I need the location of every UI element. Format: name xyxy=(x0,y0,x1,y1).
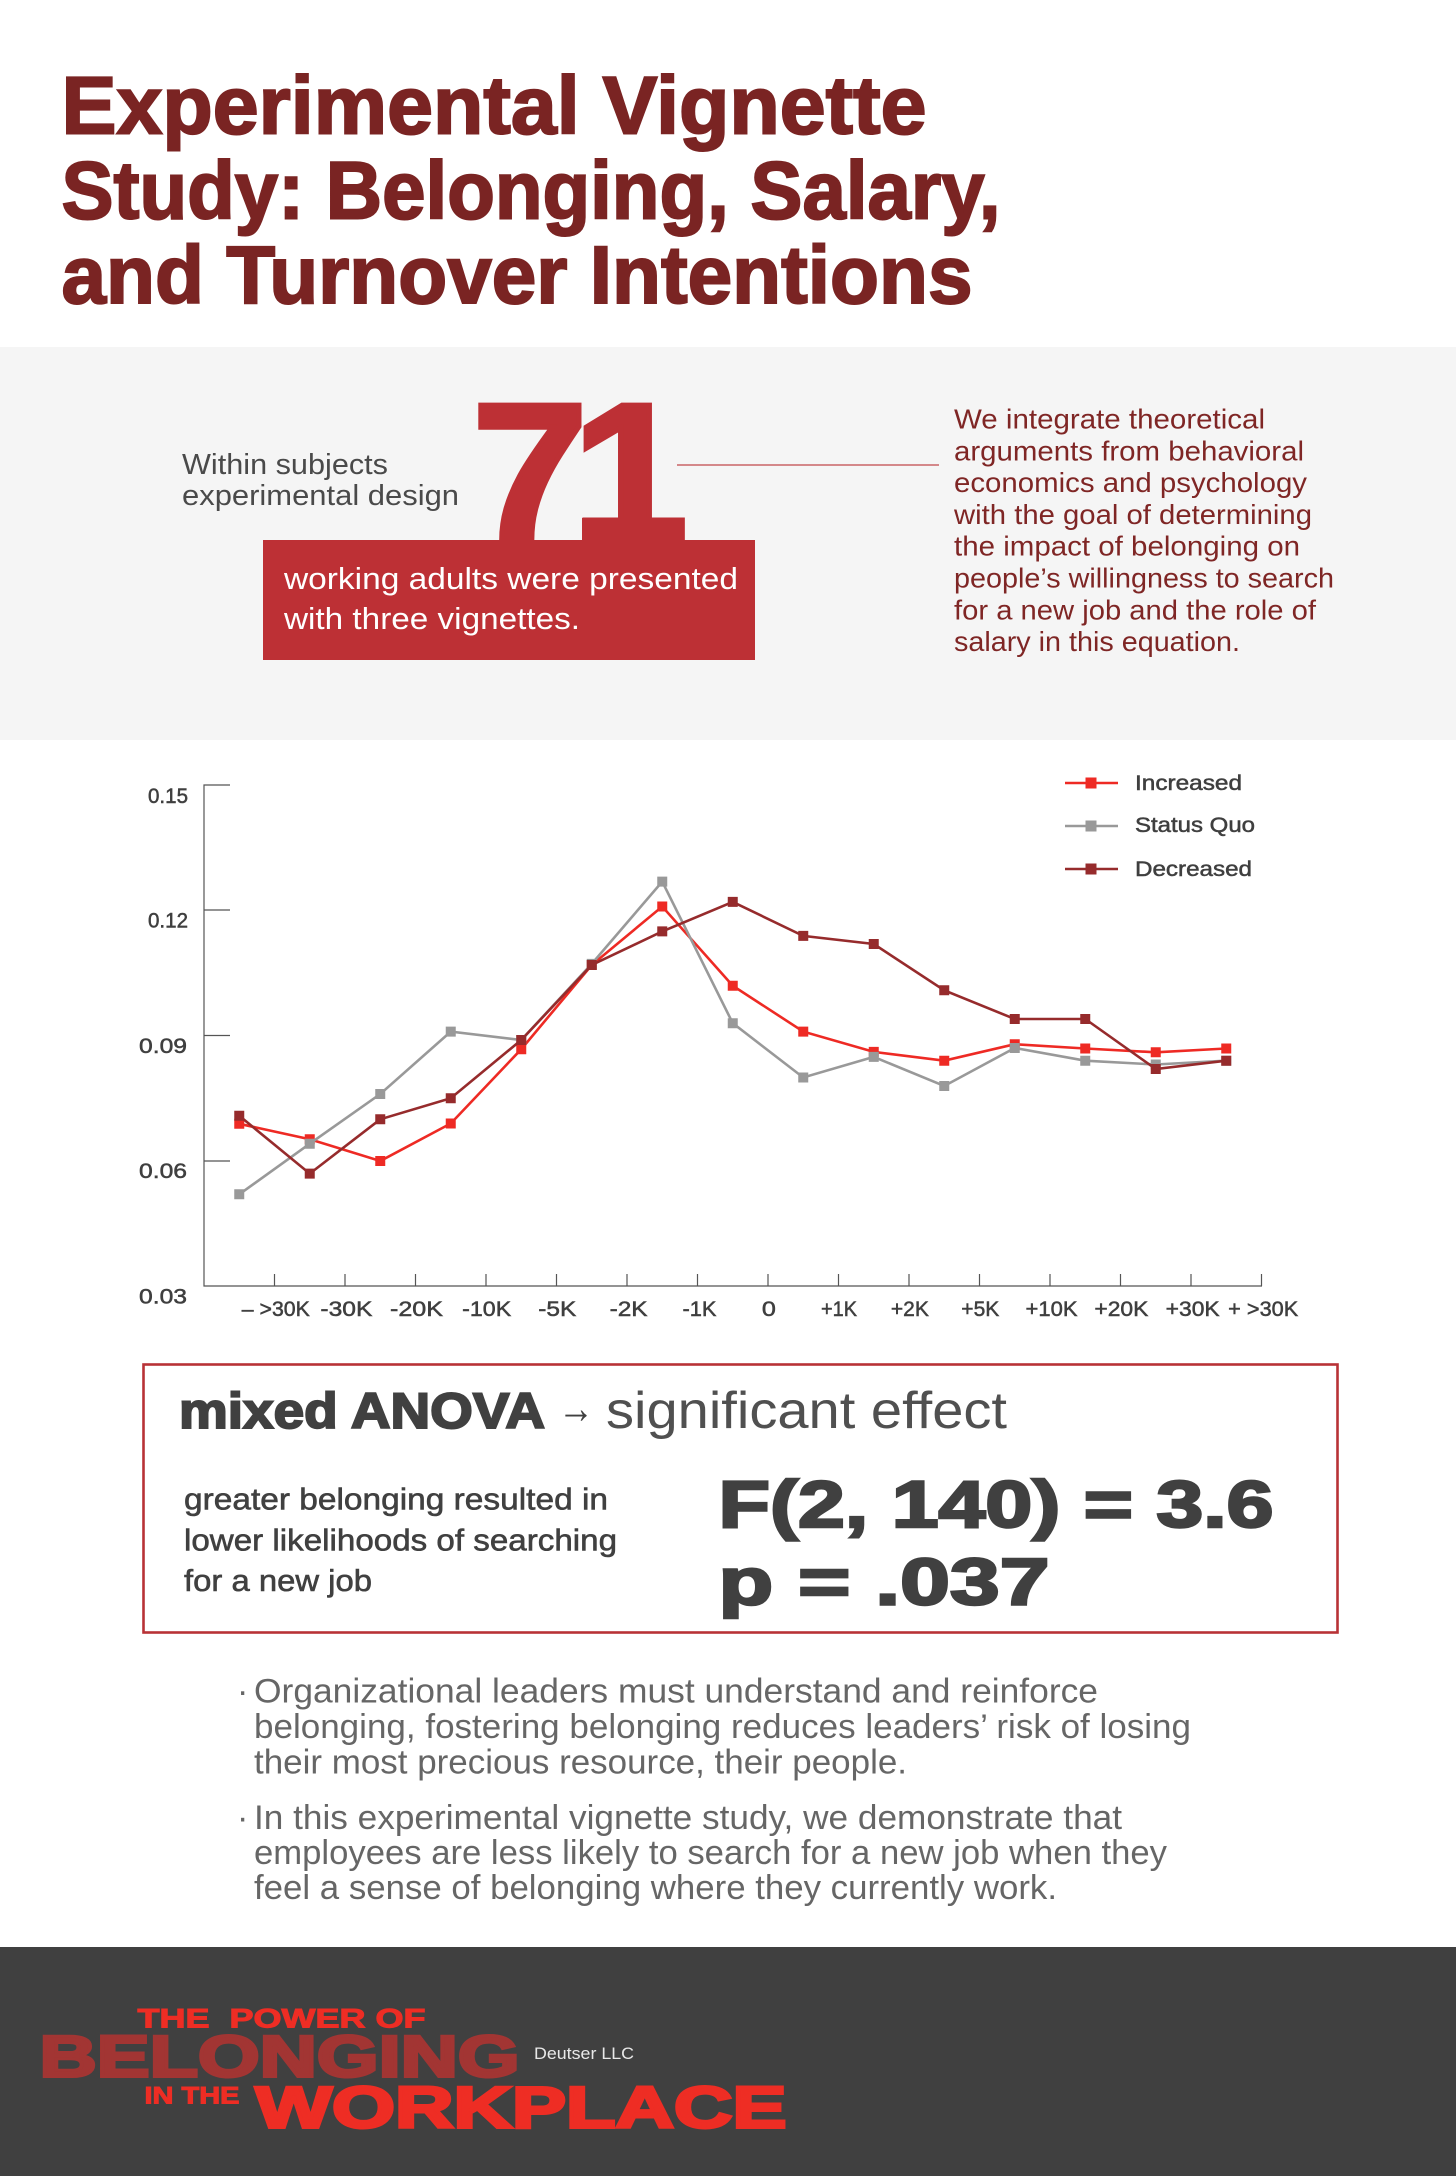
text: within subjects experimental design xyxy=(182,449,459,512)
bullet text: organizational leaders: Organizational leaders must understand and reinforce xyxy=(254,1673,1098,1711)
y axis labels xyxy=(139,785,188,1309)
bullet text: organizational leaders: belonging, fostering belonging reduces leaders’ risk of losing xyxy=(254,1708,1191,1746)
logo: the power of belonging in the workplace: THE POWER OF xyxy=(138,2004,426,2034)
text: research description: We integrate theoretical xyxy=(954,404,1265,434)
x axis labels: +1K xyxy=(821,1298,857,1321)
x axis labels: -2K xyxy=(610,1298,648,1321)
legend: Decreased xyxy=(1135,858,1252,881)
x axis labels: -5K xyxy=(538,1298,576,1321)
y axis labels: 0.03 xyxy=(139,1286,187,1309)
x axis labels: +30K xyxy=(1166,1298,1220,1321)
heading: mixed ANOVA significant effect xyxy=(179,1382,1008,1440)
footer band xyxy=(0,1947,1456,2176)
bullet text: vignette study: In this experimental vignette study, we demonstrate that xyxy=(254,1799,1123,1837)
text: greater belonging: lower likelihoods of searching xyxy=(184,1522,617,1558)
heading: mixed ANOVA significant effect: mixed ANOVA xyxy=(179,1383,545,1439)
x axis labels: +5K xyxy=(961,1298,999,1321)
title xyxy=(62,60,1000,321)
y axis labels: 0.15 xyxy=(148,785,188,808)
panel: mixed ANOVA result xyxy=(144,1364,1338,1632)
x axis labels: -20K xyxy=(390,1298,443,1321)
logo: the power of belonging in the workplace: WORKPLACE xyxy=(256,2076,786,2140)
logo: the power of belonging in the workplace: BELONGING xyxy=(40,2024,520,2090)
y axis labels: 0.12 xyxy=(148,910,188,932)
text: research description: people’s willingness to search xyxy=(954,562,1334,594)
text: research description: arguments from behavioral xyxy=(954,435,1304,466)
x axis labels: +2K xyxy=(891,1298,929,1321)
x axis labels xyxy=(242,1298,1298,1321)
big number 71: 1 xyxy=(572,363,688,582)
bullet text: organizational leaders: · xyxy=(237,1673,248,1711)
statistics xyxy=(718,1467,1274,1618)
legend: Status Quo xyxy=(1135,814,1255,837)
legend: Increased xyxy=(1135,772,1242,795)
y axis labels: 0.09 xyxy=(139,1035,187,1058)
bullet text: vignette study: employees are less likely to search for a new job when they xyxy=(254,1834,1167,1872)
callout: working adults: working adults were presented xyxy=(283,561,738,596)
text: greater belonging xyxy=(184,1482,617,1598)
statistics: F(2, 140) = 3.6 xyxy=(718,1467,1274,1541)
text: research description: for a new job and the role of xyxy=(954,594,1316,625)
x axis labels: +20K xyxy=(1094,1298,1148,1321)
text: research description: the impact of belonging on xyxy=(954,531,1300,562)
text: greater belonging: greater belonging resulted in xyxy=(184,1482,608,1516)
text: within subjects experimental design: experimental design xyxy=(182,480,459,512)
x axis labels: -1K xyxy=(682,1298,716,1321)
bullet text: vignette study xyxy=(237,1799,1167,1907)
x axis labels: -10K xyxy=(462,1298,511,1321)
text: Deutser LLC: Deutser LLC xyxy=(534,2044,634,2063)
title: Experimental Vignette xyxy=(62,60,926,152)
statistics: p = .037 xyxy=(718,1544,1050,1618)
series: increased xyxy=(234,902,1231,1166)
bullet text: organizational leaders xyxy=(237,1673,1191,1782)
x axis labels: + >30K xyxy=(1228,1298,1298,1321)
x axis labels: +10K xyxy=(1026,1298,1078,1321)
x axis labels: 0 xyxy=(762,1298,776,1321)
callout: working adults xyxy=(263,540,755,660)
logo: the power of belonging in the workplace xyxy=(40,2004,786,2140)
x axis labels: – >30K xyxy=(242,1298,310,1321)
logo: the power of belonging in the workplace: IN THE xyxy=(144,2082,240,2110)
title: and Turnover Intentions xyxy=(62,230,972,321)
text: research description: salary in this equation. xyxy=(954,626,1240,657)
text: research description xyxy=(953,404,1334,657)
bullet text: organizational leaders: their most precious resource, their people. xyxy=(254,1744,907,1782)
heading: mixed ANOVA significant effect: → xyxy=(558,1384,594,1433)
big number 71: 7 xyxy=(472,363,588,582)
series: decreased xyxy=(234,897,1231,1179)
panel: study design xyxy=(0,347,1456,740)
text: within subjects experimental design: Within subjects xyxy=(182,449,388,481)
text: greater belonging: for a new job xyxy=(184,1563,372,1598)
text: research description: with the goal of determining xyxy=(953,499,1312,530)
legend xyxy=(1065,772,1255,881)
heading: mixed ANOVA significant effect: significant effect xyxy=(606,1382,1008,1440)
bullet text: vignette study: feel a sense of belonging where they currently work. xyxy=(254,1869,1057,1907)
bullet text: vignette study: · xyxy=(237,1799,248,1837)
chart axes xyxy=(204,785,1262,1286)
text: research description: economics and psychology xyxy=(954,467,1307,498)
y axis labels: 0.06 xyxy=(139,1160,187,1183)
x axis labels: -30K xyxy=(320,1298,372,1321)
big number 71 xyxy=(472,363,688,582)
title: Study: Belonging, Salary, xyxy=(62,146,1000,236)
line chart xyxy=(139,772,1298,1321)
series: status quo xyxy=(234,877,1231,1199)
callout: working adults: with three vignettes. xyxy=(283,601,580,636)
